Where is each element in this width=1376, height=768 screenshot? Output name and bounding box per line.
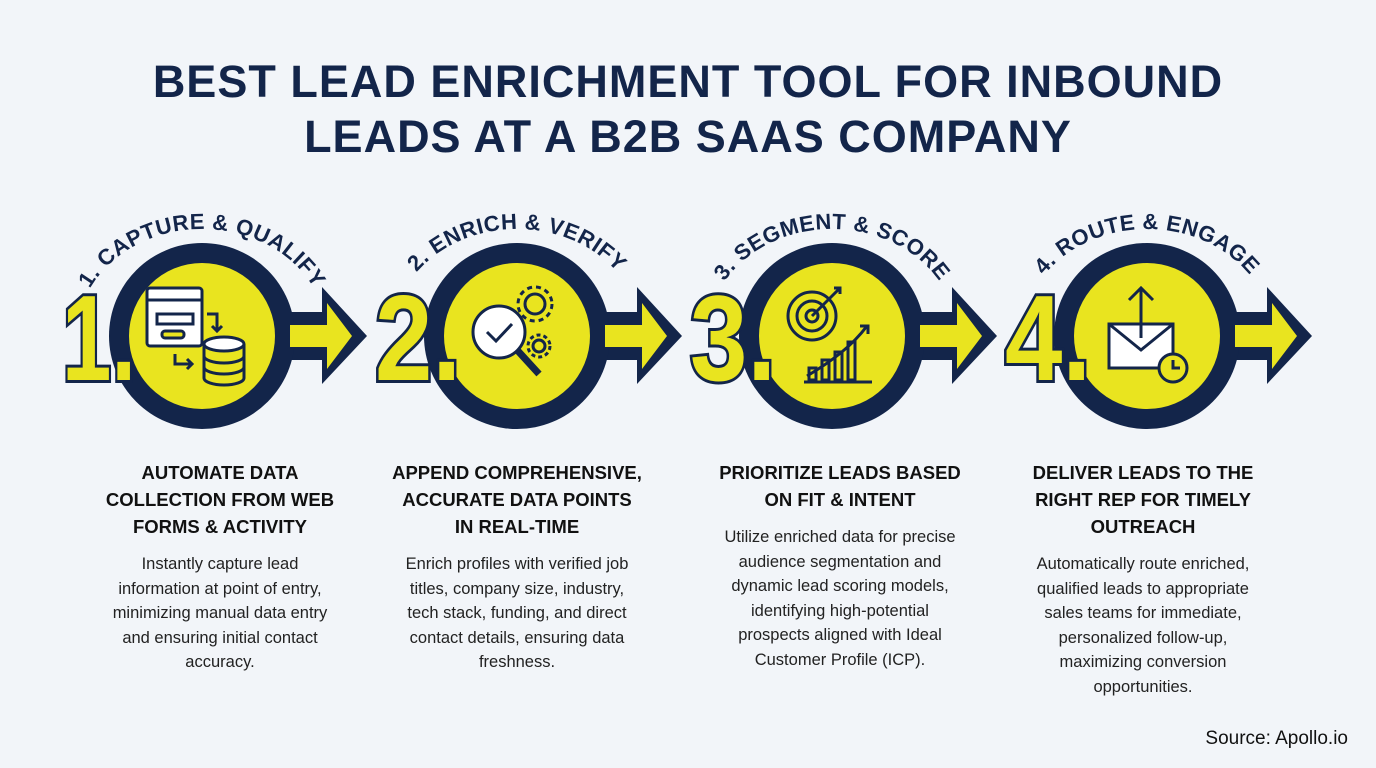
- text: step 2: freshness.: [479, 653, 555, 671]
- step 1 graphic: [62, 214, 367, 429]
- text: step 3: prospects aligned with Ideal: [738, 626, 942, 644]
- text: step 4: sales teams for immediate,: [1044, 604, 1242, 622]
- text: step 1: COLLECTION FROM WEB: [106, 489, 334, 510]
- text: step 2: titles, company size, industry,: [410, 580, 624, 598]
- text: step 1: and ensuring initial contact: [122, 628, 318, 646]
- text: step 3: dynamic lead scoring models,: [731, 577, 949, 595]
- icon: envelope with clock: [1109, 288, 1187, 382]
- text: step 4: maximizing conversion: [1060, 653, 1226, 671]
- curved label 3: 3. SEGMENT & SCORE: [714, 214, 950, 280]
- step 4 graphic: [1004, 214, 1312, 429]
- text: step 3: Customer Profile (ICP).: [755, 650, 925, 668]
- text: step 3: [719, 462, 961, 668]
- text: step 3: ON FIT & INTENT: [764, 489, 916, 510]
- source: Source: Apollo.io: [1205, 728, 1348, 749]
- big number 4: 4.: [1005, 270, 1091, 406]
- text: step 4: opportunities.: [1093, 678, 1193, 696]
- text: step 1: AUTOMATE DATA: [142, 462, 298, 483]
- text: step 4: qualified leads to appropriate: [1037, 580, 1249, 598]
- curved label 2: 2. ENRICH & VERIFY: [408, 214, 628, 272]
- text: step 2: contact details, ensuring data: [410, 628, 624, 646]
- icon: magnifier with gears: [473, 287, 552, 374]
- text: step 1: [106, 462, 334, 671]
- text: step 2: [392, 462, 642, 671]
- text: step 4: OUTREACH: [1091, 516, 1195, 537]
- text: step 2: Enrich profiles with verified job: [406, 555, 628, 573]
- big number 3: 3.: [690, 270, 776, 406]
- big number 1: 1.: [62, 270, 136, 406]
- icon: form to database: [147, 288, 244, 385]
- text: step 2: ACCURATE DATA POINTS: [402, 489, 632, 510]
- curved label 4: 4. ROUTE & ENGAGE: [1037, 214, 1260, 274]
- text: step 4: Automatically route enriched,: [1037, 555, 1249, 573]
- text: step 2: tech stack, funding, and direct: [407, 604, 627, 622]
- step 3 graphic: [690, 214, 997, 429]
- title: LEADS AT A B2B SAAS COMPANY: [304, 111, 1072, 162]
- big number 2: 2.: [375, 270, 461, 406]
- icon: target and growth chart: [788, 288, 872, 382]
- text: step 4: personalized follow-up,: [1059, 628, 1227, 646]
- title: BEST LEAD ENRICHMENT TOOL FOR INBOUND: [153, 56, 1223, 107]
- text: step 3: Utilize enriched data for precise: [724, 528, 956, 546]
- text: step 1: information at point of entry,: [118, 580, 322, 598]
- text: step 1: FORMS & ACTIVITY: [133, 516, 307, 537]
- text: step 1: Instantly capture lead: [142, 555, 298, 573]
- title: [153, 56, 1223, 162]
- text: step 3: PRIORITIZE LEADS BASED: [719, 462, 961, 483]
- curved label 1: 1. CAPTURE & QUALIFY: [80, 214, 326, 288]
- steps graphics: [62, 214, 1312, 429]
- text: step 3: audience segmentation and: [739, 552, 941, 570]
- text: step 2: IN REAL-TIME: [455, 516, 579, 537]
- text: step 2: APPEND COMPREHENSIVE,: [392, 462, 642, 483]
- text: step 4: DELIVER LEADS TO THE: [1033, 462, 1253, 483]
- text: step 4: RIGHT REP FOR TIMELY: [1035, 489, 1251, 510]
- text: step 1: minimizing manual data entry: [113, 604, 327, 622]
- text: step 3: identifying high-potential: [751, 602, 929, 620]
- text: step 1: accuracy.: [185, 653, 255, 671]
- text: step 4: [1033, 462, 1253, 696]
- step 2 graphic: [375, 214, 682, 429]
